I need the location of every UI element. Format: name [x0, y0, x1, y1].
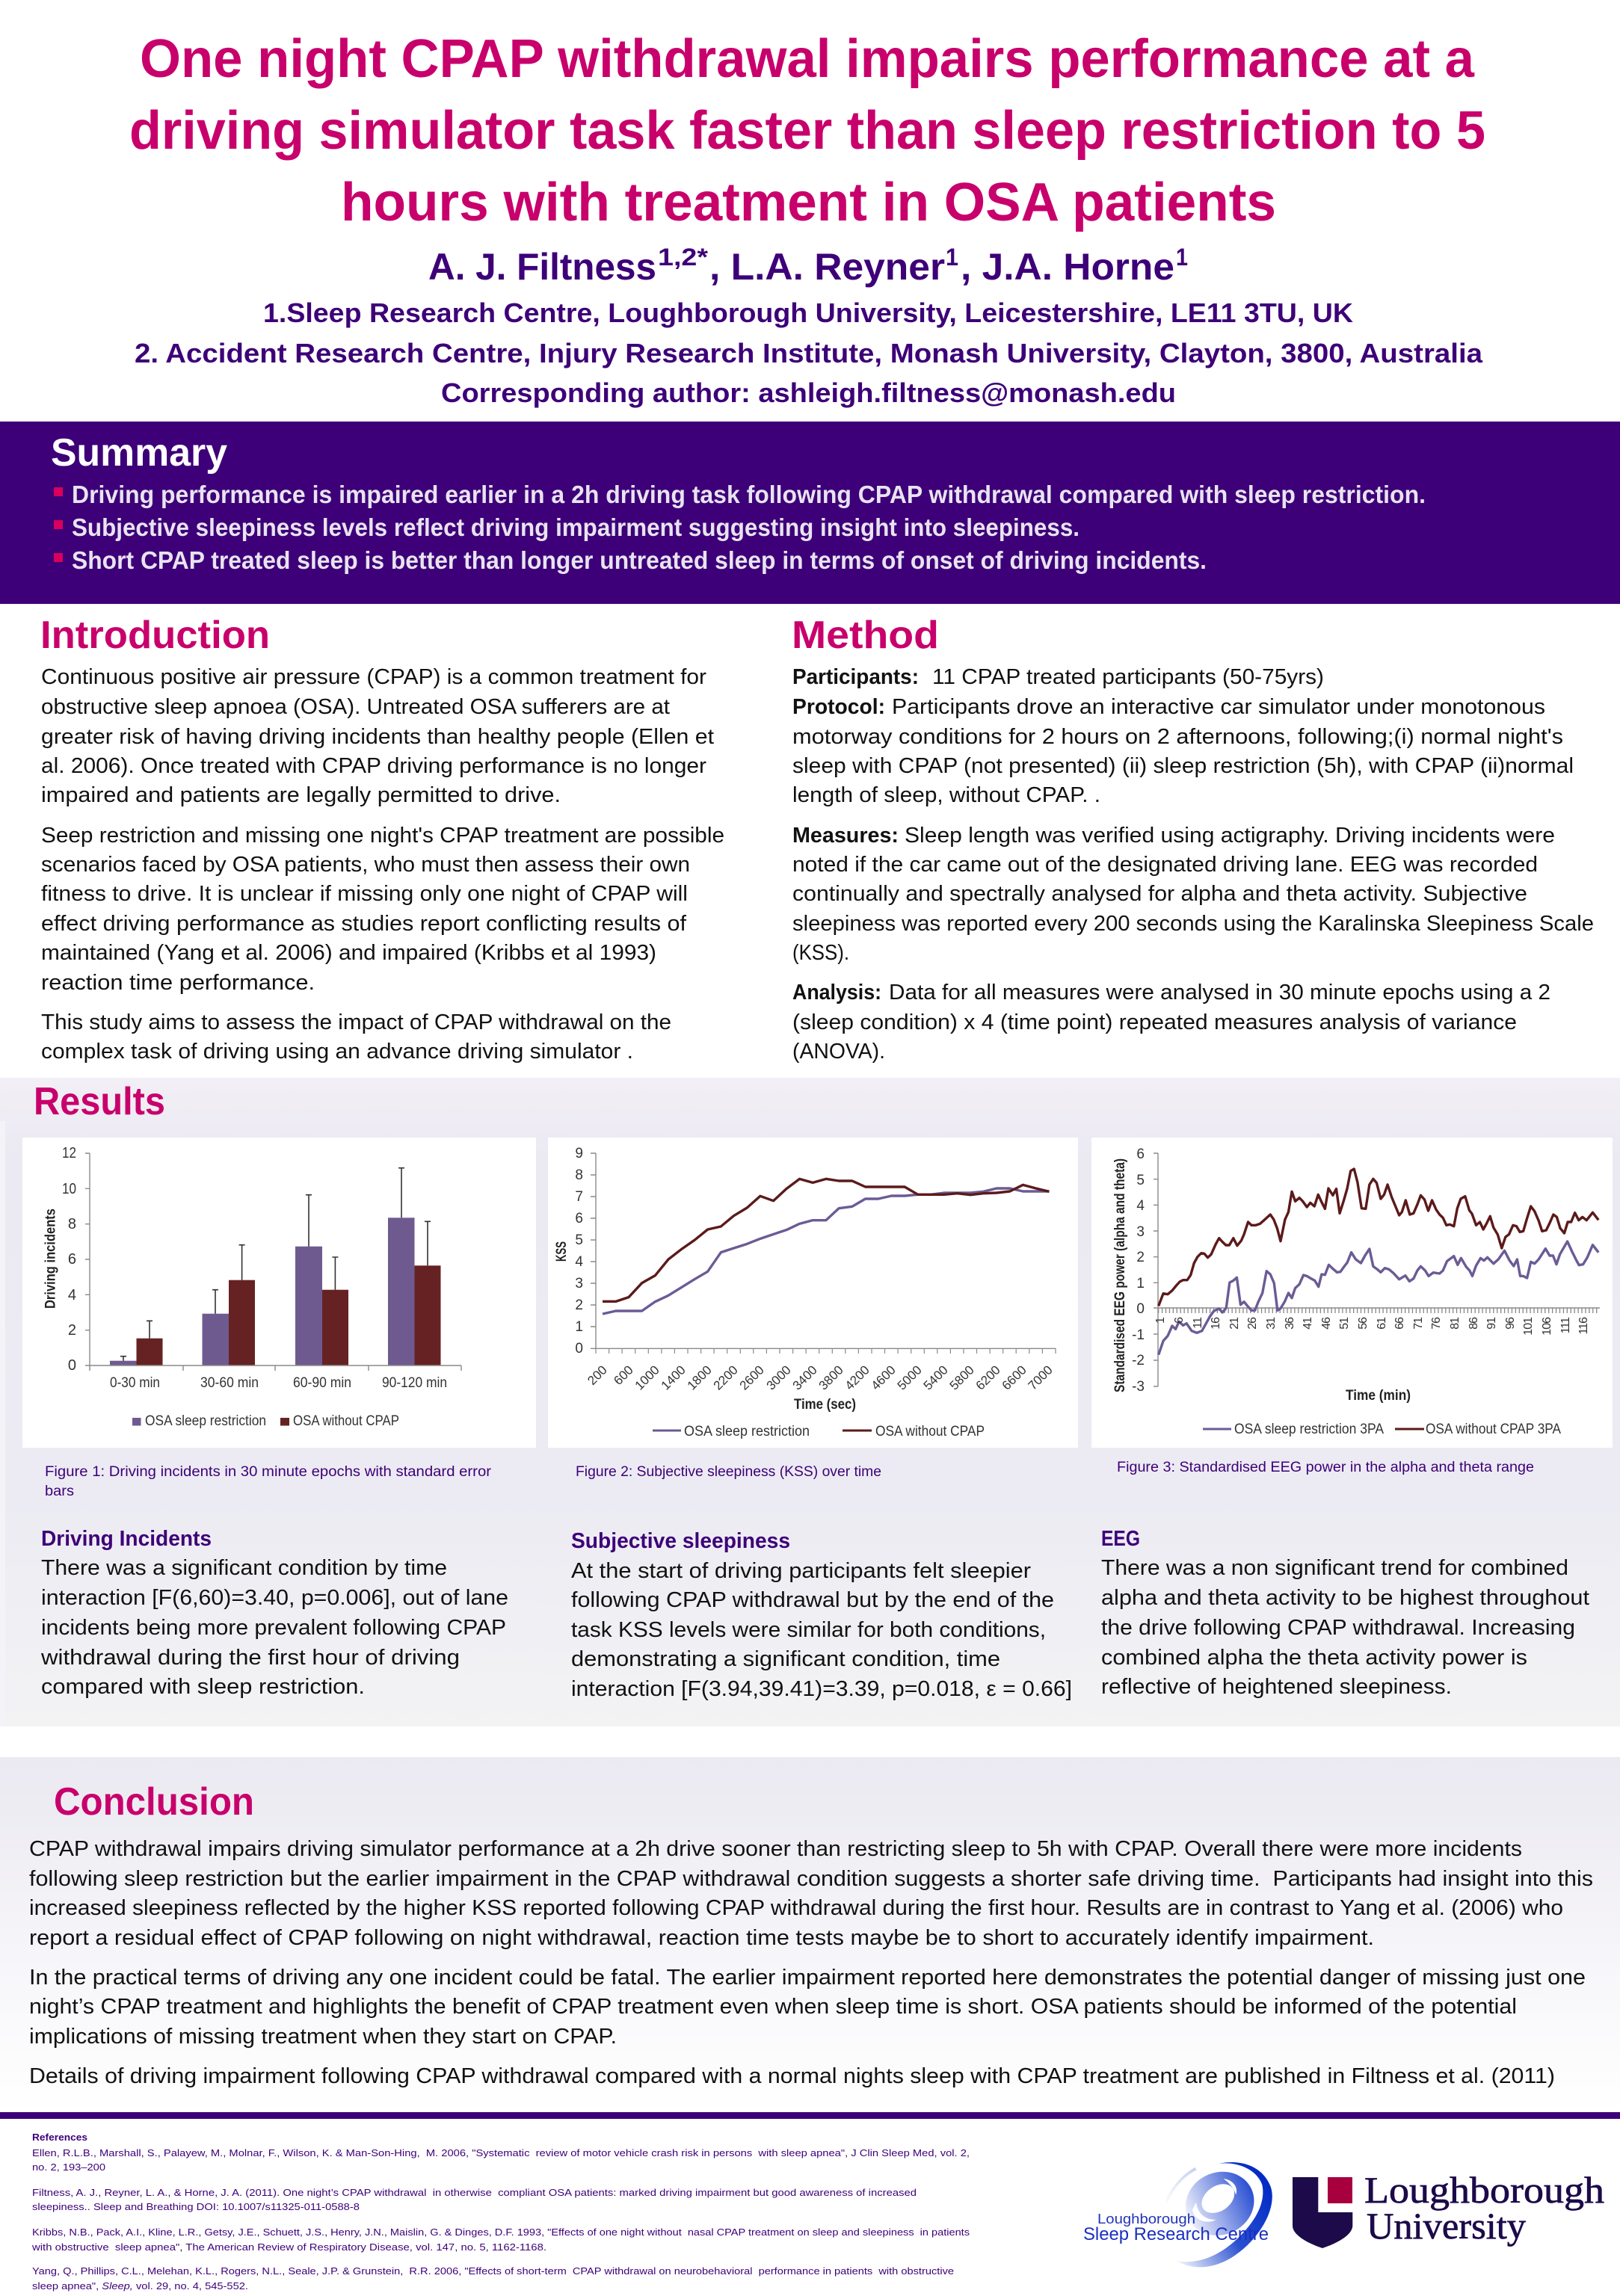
references: sleep apnea", Sleep, vol. 29, no. 4, 545-552. — [32, 2280, 248, 2292]
panel: summary — [0, 422, 1620, 604]
driving incidents body — [40, 1556, 508, 1699]
x axis labels: 111 — [1559, 1317, 1572, 1333]
y axis labels: 2 — [575, 1297, 583, 1313]
x axis labels: 90-120 min — [382, 1375, 447, 1391]
x axis labels: 0-30 min — [110, 1375, 160, 1391]
affiliations — [135, 297, 1483, 408]
x axis labels: 16 — [1210, 1317, 1222, 1330]
method text: Analysis: — [792, 981, 881, 1004]
bars: OSA without CPAP — [136, 1265, 441, 1365]
y axis labels: 0 — [1136, 1301, 1145, 1317]
x axis labels — [110, 1375, 447, 1391]
title: One night CPAP withdrawal impairs performance at a — [140, 29, 1475, 89]
method text: length of sleep, without CPAP. . — [792, 783, 1100, 807]
driving incidents body: There was a significant condition by time — [41, 1556, 447, 1580]
y axis labels: 9 — [575, 1146, 583, 1161]
x axis labels: 60-90 min — [293, 1375, 351, 1391]
x axis labels: 81 — [1449, 1317, 1462, 1330]
y axis labels: 8 — [68, 1216, 76, 1232]
chart: EEG power line chart — [1091, 1138, 1613, 1448]
x axis labels: 6 — [1173, 1317, 1186, 1324]
y axis title: Standardised EEG power (alpha and theta) — [1112, 1158, 1128, 1392]
text block: subjective sleepiness — [571, 1529, 1072, 1701]
y axis labels: 3 — [1136, 1224, 1145, 1240]
x axis labels: 116 — [1577, 1317, 1590, 1335]
x axis labels: 4200 — [843, 1363, 872, 1393]
driving incidents body: incidents being more prevalent following CPAP — [41, 1616, 506, 1640]
introduction heading: Introduction — [40, 614, 270, 657]
y axis labels: 3 — [575, 1276, 583, 1292]
x ticks — [1158, 1308, 1600, 1313]
method text — [792, 665, 1594, 1064]
y axis labels: 0 — [68, 1357, 76, 1374]
logo text: Loughborough — [1364, 2169, 1604, 2211]
axes — [591, 1153, 1056, 1348]
x axis labels: 5000 — [895, 1363, 925, 1393]
conclusion text — [29, 1837, 1593, 2088]
y axis labels — [62, 1145, 76, 1374]
EEG heading: EEG — [1101, 1527, 1140, 1551]
x axis labels: 2200 — [711, 1363, 741, 1393]
panel: introduction — [40, 614, 724, 1064]
x axis labels: 1000 — [632, 1363, 662, 1393]
method text: Measures: — [792, 824, 899, 848]
EEG body — [1101, 1556, 1589, 1699]
introduction text: Seep restriction and missing one night's CPAP treatment are possible — [41, 824, 724, 848]
references: with obstructive sleep apnea", The American Review of Respiratory Disease, vol. 147, no. 5, 1162-1168. — [31, 2241, 546, 2253]
subjective sleepiness body: interaction [F(3.94,39.41)=3.39, p=0.018, ε = 0.66] — [571, 1677, 1072, 1701]
y axis title: Driving incidents — [43, 1209, 58, 1309]
references: sleepiness.. Sleep and Breathing DOI: 10.1007/s11325-011-0588-8 — [32, 2201, 360, 2212]
x axis title: Time (sec) — [794, 1397, 856, 1413]
results heading: Results — [34, 1080, 165, 1123]
method heading: Method — [792, 614, 939, 657]
x axis labels: 5400 — [921, 1363, 951, 1393]
driving incidents body: compared with sleep restriction. — [41, 1675, 365, 1699]
introduction text: impaired and patients are legally permitted to drive. — [41, 783, 561, 807]
y axis labels: 6 — [68, 1251, 76, 1268]
x axis labels: 91 — [1485, 1317, 1498, 1330]
conclusion heading: Conclusion — [54, 1780, 254, 1824]
method text: (KSS). — [792, 941, 849, 965]
logo text: Loughborough — [1097, 2212, 1195, 2226]
x axis labels: 31 — [1265, 1317, 1278, 1330]
error bars — [120, 1168, 431, 1361]
driving incidents body: withdrawal during the first hour of driving — [40, 1646, 460, 1670]
panel: conclusion — [0, 1757, 1620, 2112]
references: Ellen, R.L.B., Marshall, S., Palayew, M., Molnar, F., Wilson, K. & Man-Son-Hing, M. 2006, "Systematic review of motor vehicle crash risk in persons with sleep apnea", J Clin Sleep Med, vol. 2, — [32, 2147, 970, 2158]
method text: Sleep length was verified using actigraphy. Driving incidents were — [905, 824, 1555, 848]
introduction text: Continuous positive air pressure (CPAP) is a common treatment for — [41, 665, 706, 689]
authors: , J.A. Horne — [961, 246, 1174, 288]
text block: driving incidents — [40, 1527, 508, 1699]
legend: OSA sleep restriction — [684, 1424, 810, 1439]
figure 3 caption: Figure 3: Standardised EEG power in the alpha and theta range — [1117, 1460, 1534, 1475]
line: OSA without CPAP 3PA — [1159, 1169, 1598, 1306]
EEG body: alpha and theta activity to be highest throughout — [1101, 1586, 1589, 1610]
authors: 1 — [1176, 244, 1188, 271]
method text: 11 CPAP treated participants (50-75yrs) — [932, 665, 1324, 689]
x axis labels: 5800 — [947, 1363, 977, 1393]
y axis labels: 4 — [575, 1254, 583, 1270]
y axis labels: 4 — [68, 1287, 76, 1303]
method text: continually and spectrally analysed for alpha and theta activity. Subjective — [792, 882, 1527, 906]
logo text: University — [1367, 2205, 1526, 2247]
x axis title: Time (min) — [1346, 1388, 1411, 1404]
method text: sleepiness was reported every 200 seconds using the Karalinska Sleepiness Scale — [792, 912, 1594, 936]
x axis labels: 86 — [1467, 1317, 1480, 1330]
chart: subjective sleepiness line chart — [548, 1138, 1078, 1448]
legend: OSA sleep restriction 3PA — [1234, 1422, 1384, 1437]
introduction text: al. 2006). Once treated with CPAP driving performance is no longer — [41, 754, 706, 778]
summary bullets: Subjective sleepiness levels reflect driving impairment suggesting insight into sleepiness. — [72, 513, 1080, 541]
conclusion text: Details of driving impairment following CPAP withdrawal compared with a normal nights sleep with CPAP treatment are published in Filtness et al. (2011) — [29, 2064, 1555, 2088]
authors — [428, 244, 1188, 288]
x axis labels: 61 — [1376, 1317, 1388, 1330]
introduction text: complex task of driving using an advance driving simulator . — [41, 1040, 633, 1064]
conclusion text: report a residual effect of CPAP following on night withdrawal, reaction time tests maybe be to short to accurately identify impairment. — [29, 1926, 1374, 1950]
method text: Participants drove an interactive car simulator under monotonous — [892, 695, 1545, 719]
subjective sleepiness body: following CPAP withdrawal but by the end of the — [571, 1588, 1054, 1612]
x axis labels: 1800 — [685, 1363, 715, 1393]
x axis labels: 96 — [1504, 1317, 1517, 1330]
subjective sleepiness body: demonstrating a significant condition, time — [571, 1647, 1000, 1671]
x axis labels: 106 — [1541, 1317, 1553, 1336]
method text: sleep with CPAP (not presented) (ii) sleep restriction (5h), with CPAP (ii)normal — [792, 754, 1574, 778]
introduction text: greater risk of having driving incidents than healthy people (Ellen et — [41, 725, 714, 749]
y axis labels: 8 — [575, 1167, 583, 1183]
x axis labels: 4600 — [869, 1363, 899, 1393]
introduction text — [41, 665, 724, 1064]
driving incidents heading: Driving Incidents — [41, 1527, 212, 1551]
line: OSA without CPAP — [603, 1179, 1049, 1301]
legend — [1203, 1422, 1561, 1437]
x axis labels: 200 — [585, 1363, 610, 1388]
logo text — [1364, 2169, 1604, 2247]
y axis labels: 1 — [575, 1319, 583, 1335]
method text: Data for all measures were analysed in 30 minute epochs using a 2 — [889, 981, 1550, 1004]
x axis labels: 2600 — [737, 1363, 767, 1393]
x axis labels: 3000 — [764, 1363, 794, 1393]
figure 1 caption: Figure 1: Driving incidents in 30 minute epochs with standard error — [45, 1464, 492, 1480]
references: References — [32, 2132, 87, 2143]
affiliations: 1.Sleep Research Centre, Loughborough University, Leicestershire, LE11 3TU, UK — [263, 297, 1353, 328]
x axis labels: 66 — [1393, 1317, 1406, 1330]
x axis labels: 21 — [1228, 1317, 1241, 1330]
authors: 1 — [946, 244, 958, 271]
text block: EEG — [1101, 1527, 1589, 1699]
x axis labels: 71 — [1412, 1317, 1425, 1330]
affiliations: Corresponding author: ashleigh.filtness@monash.edu — [441, 377, 1176, 408]
conclusion text: night’s CPAP treatment and highlights the benefit of CPAP treatment even when sleep time is short. OSA patients should be informed of the potential — [29, 1995, 1517, 2019]
legend — [653, 1424, 985, 1439]
logo: Loughborough University — [1293, 2169, 1604, 2248]
conclusion text: increased sleepiness reflected by the higher KSS reported following CPAP withdrawal during the first hour. Results are in contrast to Yang et al. (2006) who — [29, 1896, 1563, 1920]
references: no. 2, 193–200 — [32, 2161, 105, 2173]
x axis labels: 7000 — [1026, 1363, 1056, 1393]
x axis labels: 1 — [1154, 1317, 1167, 1324]
y axis labels: 10 — [62, 1181, 76, 1197]
EEG body: reflective of heightened sleepiness. — [1101, 1675, 1452, 1699]
legend: OSA without CPAP — [293, 1413, 399, 1429]
subjective sleepiness heading: Subjective sleepiness — [571, 1529, 790, 1553]
legend: OSA without CPAP — [875, 1424, 985, 1439]
bars: OSA sleep restriction — [110, 1218, 414, 1365]
title — [129, 29, 1485, 232]
method text: (sleep condition) x 4 (time point) repeated measures analysis of variance — [792, 1010, 1517, 1034]
subjective sleepiness body: At the start of driving participants felt sleepier — [571, 1559, 1031, 1583]
chart: driving incidents bar chart — [22, 1138, 536, 1448]
conclusion text: following sleep restriction but the earlier impairment in the CPAP withdrawal condition suggests a shorter safe driving time. Participants had insight into this — [29, 1867, 1593, 1891]
authors: A. J. Filtness — [428, 246, 656, 288]
x axis labels: 600 — [611, 1363, 636, 1388]
conclusion text: In the practical terms of driving any one incident could be fatal. The earlier impairment reported here demonstrates the potential danger of missing just one — [29, 1966, 1586, 1990]
y axis labels: 1 — [1136, 1276, 1145, 1292]
x axis labels: 6200 — [973, 1363, 1003, 1393]
x axis labels: 56 — [1357, 1317, 1370, 1330]
x axis labels: 3800 — [816, 1363, 846, 1393]
y axis labels: 5 — [1136, 1173, 1145, 1188]
axes — [1154, 1153, 1600, 1386]
y axis labels: 6 — [1136, 1147, 1145, 1162]
references: Yang, Q., Phillips, C.L., Melehan, K.L., Rogers, N.L., Seale, J.P. & Grunstein, R.R. 2006, "Effects of short-term CPAP withdrawal on neurobehavioral performance in patients with obstructive — [32, 2265, 954, 2277]
EEG body: combined alpha the theta activity power is — [1101, 1646, 1527, 1670]
references — [31, 2132, 970, 2292]
EEG body: There was a non significant trend for combined — [1101, 1556, 1568, 1580]
y axis labels: -2 — [1132, 1353, 1145, 1368]
legend — [132, 1413, 399, 1429]
x axis labels: 76 — [1430, 1317, 1443, 1330]
x axis labels: 6600 — [1000, 1363, 1029, 1393]
figure 1 caption: bars — [45, 1484, 74, 1499]
y axis labels: 2 — [1136, 1250, 1145, 1265]
summary bullets: Driving performance is impaired earlier in a 2h driving task following CPAP withdrawal compared with sleep restriction. — [72, 481, 1426, 508]
introduction text: scenarios faced by OSA patients, who must then assess their own — [41, 853, 690, 877]
introduction text: effect driving performance as studies report conflicting results of — [41, 912, 687, 936]
authors: 1,2* — [658, 244, 709, 271]
affiliations: 2. Accident Research Centre, Injury Research Institute, Monash University, Clayton, 3800, Australia — [135, 338, 1483, 368]
method text: Protocol: — [792, 695, 885, 719]
footer rule — [0, 2112, 1620, 2119]
conclusion text: CPAP withdrawal impairs driving simulator performance at a 2h drive sooner than restricting sleep to 5h with CPAP. Overall there were more incidents — [29, 1837, 1522, 1861]
EEG body: the drive following CPAP withdrawal. Increasing — [1101, 1616, 1575, 1640]
y axis labels: 4 — [1136, 1198, 1145, 1214]
legend: OSA sleep restriction — [145, 1413, 266, 1429]
axes — [85, 1153, 461, 1371]
introduction text: reaction time performance. — [41, 971, 315, 995]
figure 1 caption — [45, 1464, 492, 1499]
method text: motorway conditions for 2 hours on 2 afternoons, following;(i) normal night's — [792, 725, 1563, 749]
x axis labels: 41 — [1302, 1317, 1314, 1330]
y axis labels: 0 — [575, 1341, 583, 1357]
method text: (ANOVA). — [792, 1040, 885, 1064]
y axis title: KSS — [554, 1241, 570, 1262]
x axis labels: 46 — [1320, 1317, 1333, 1330]
y axis labels: 6 — [575, 1211, 583, 1226]
figure 2 caption: Figure 2: Subjective sleepiness (KSS) over time — [576, 1464, 881, 1480]
x axis labels: 26 — [1246, 1317, 1259, 1330]
subjective sleepiness body: task KSS levels were similar for both conditions, — [571, 1618, 1046, 1642]
driving incidents body: interaction [F(6,60)=3.40, p=0.006], out of lane — [41, 1586, 508, 1610]
logo text: Sleep Research Centre — [1083, 2224, 1269, 2244]
logo text — [1083, 2212, 1269, 2244]
title: driving simulator task faster than sleep restriction to 5 — [129, 101, 1485, 161]
introduction text: obstructive sleep apnoea (OSA). Untreated OSA sufferers are at — [41, 695, 670, 719]
title: hours with treatment in OSA patients — [341, 173, 1276, 232]
logo: Loughborough Sleep Research Centre — [1083, 2161, 1272, 2267]
y axis labels: -3 — [1132, 1379, 1145, 1395]
x axis labels: 30-60 min — [200, 1375, 259, 1391]
x axis labels: 51 — [1338, 1317, 1351, 1330]
introduction text: This study aims to assess the impact of CPAP withdrawal on the — [41, 1010, 671, 1034]
x axis labels: 3400 — [790, 1363, 820, 1393]
x axis labels — [1154, 1317, 1590, 1336]
y axis labels: 7 — [575, 1189, 583, 1205]
panel: method — [792, 614, 1594, 1064]
y axis labels: 5 — [575, 1232, 583, 1248]
legend: OSA without CPAP 3PA — [1426, 1422, 1561, 1437]
x axis labels: 11 — [1192, 1317, 1204, 1329]
icon: shield — [1293, 2177, 1352, 2248]
references: Filtness, A. J., Reyner, L. A., & Horne, J. A. (2011). One night’s CPAP withdrawal in otherwise compliant OSA patients: marked driving impairment but good awareness of increased — [32, 2187, 917, 2198]
method text: Participants: — [792, 665, 919, 689]
y axis labels — [1132, 1147, 1145, 1395]
y axis labels: 12 — [62, 1145, 76, 1161]
y axis labels: -1 — [1132, 1327, 1145, 1343]
introduction text: maintained (Yang et al. 2006) and impaired (Kribbs et al 1993) — [41, 941, 656, 965]
line: OSA sleep restriction — [603, 1188, 1049, 1314]
x axis labels: 101 — [1522, 1317, 1535, 1336]
summary bullets: Short CPAP treated sleep is better than longer untreated sleep in terms of onset of driving incidents. — [72, 546, 1207, 574]
subjective sleepiness body — [571, 1559, 1072, 1701]
panel: results — [0, 1078, 1620, 1726]
x ticks — [596, 1348, 1056, 1354]
y axis labels: 2 — [68, 1322, 76, 1339]
x axis labels: 1400 — [659, 1363, 689, 1393]
references: Kribbs, N.B., Pack, A.I., Kline, L.R., Getsy, J.E., Schuett, J.S., Henry, J.N., Maislin, G. & Dinges, D.F. 1993, "Effects of one night without nasal CPAP treatment on sleep and sleepiness in patients — [32, 2226, 970, 2238]
introduction text: fitness to drive. It is unclear if missing only one night of CPAP will — [41, 882, 688, 906]
line: OSA sleep restriction 3PA — [1159, 1241, 1598, 1355]
x axis labels — [585, 1363, 1056, 1393]
conclusion text: implications of missing treatment when they start on CPAP. — [29, 2025, 617, 2049]
method text: noted if the car came out of the designated driving lane. EEG was recorded — [792, 853, 1538, 877]
x axis labels: 36 — [1284, 1317, 1296, 1330]
icon: swirl — [1164, 2161, 1272, 2267]
summary heading: Summary — [51, 431, 227, 475]
authors: , L.A. Reyner — [709, 246, 945, 288]
y axis labels — [575, 1146, 583, 1357]
summary bullets — [54, 481, 1426, 574]
